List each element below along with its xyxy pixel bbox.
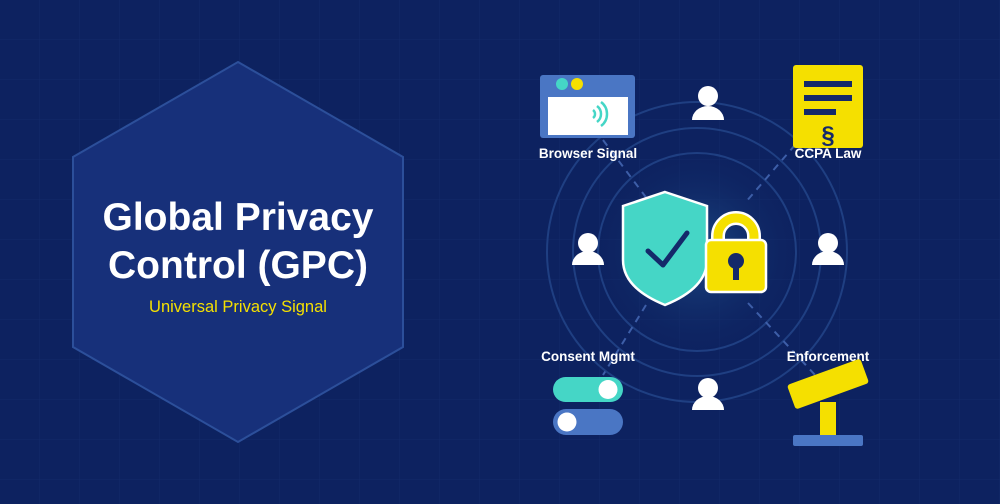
icon: gavel	[787, 358, 869, 446]
panel: title hexagon	[73, 62, 403, 442]
icon: toggles	[553, 377, 623, 435]
icon: CCPA document	[793, 65, 863, 149]
icons: persons	[572, 86, 844, 410]
icon: CCPA document: §	[821, 122, 835, 149]
title line 2: Control (GPC)	[108, 244, 368, 287]
label: Browser Signal: Browser Signal	[539, 146, 637, 161]
label: CCPA Law: CCPA Law	[795, 146, 862, 161]
title: Global Privacy	[103, 196, 374, 239]
label: Consent Mgmt: Consent Mgmt	[541, 349, 635, 364]
icon: shield	[623, 192, 707, 305]
diagram: privacy ecosystem	[539, 65, 870, 446]
subtitle: Universal Privacy Signal	[149, 298, 327, 316]
icon: lock	[706, 218, 766, 292]
icon: browser	[540, 75, 635, 138]
label: Enforcement: Enforcement	[787, 349, 870, 364]
